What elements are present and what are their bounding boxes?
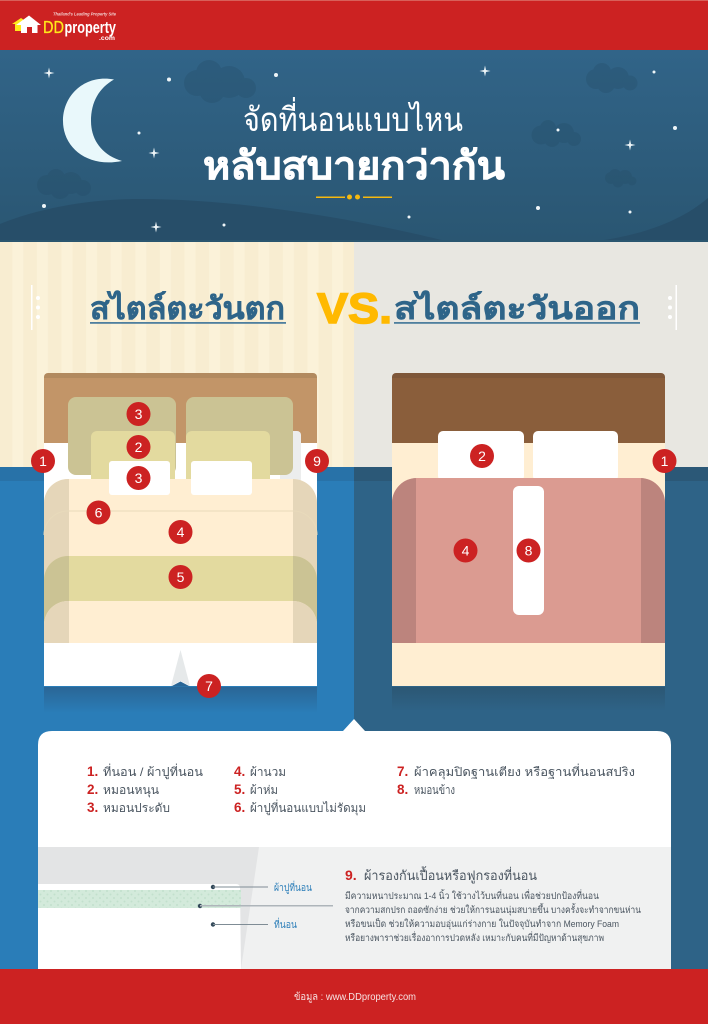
side bolster bbox=[513, 486, 544, 615]
number badges: 4 bbox=[177, 524, 185, 540]
legend list: หมอนประดับ bbox=[103, 801, 170, 815]
legend list: 1. bbox=[87, 764, 98, 779]
small pillows bbox=[109, 461, 252, 495]
item 9 description: หรือขนเป็ด ช่วยให้ความอบอุ่นแก่ร่างกาย ในปัจจุบันทำจาก Memory Foam bbox=[345, 917, 619, 930]
icon: crescent moon bbox=[63, 79, 122, 162]
source text: ข้อมูล : www.DDproperty.com bbox=[294, 991, 416, 1003]
number badges: 7 bbox=[205, 678, 213, 694]
item 9 description: มีความหนาประมาณ 1-4 นิ้ว ใช้วางไว้บนที่นอน เพื่อช่วยปกป้องที่นอน bbox=[345, 889, 599, 902]
logo: DDproperty: .com bbox=[99, 35, 115, 42]
wall ornament right bbox=[668, 285, 677, 330]
mattress pad panel bbox=[38, 847, 671, 969]
shadow bbox=[44, 687, 317, 713]
number badges: 4 bbox=[462, 542, 470, 558]
number badges: 8 bbox=[525, 542, 533, 558]
headboard bbox=[44, 373, 317, 453]
callout: fitted sheet bbox=[211, 880, 312, 894]
legend list: ผ้าปูที่นอนแบบไม่รัดมุม bbox=[250, 799, 366, 816]
callout: mattress: ที่นอน bbox=[274, 917, 297, 931]
night sky panel bbox=[0, 50, 708, 242]
title: หลับสบายกว่ากัน bbox=[203, 145, 505, 188]
item 9 description: หรือยางพาราช่วยเรื่องอาการปวดหลัง เหมาะกับคนที่มีปัญหาด้านสุขภาพ bbox=[345, 931, 604, 944]
hills bbox=[0, 198, 708, 242]
callout: mattress pad bbox=[198, 904, 333, 908]
logo: DDproperty: Thailand's Leading Property Site bbox=[53, 12, 116, 18]
shadow bbox=[392, 687, 665, 711]
bed valance fold bbox=[171, 650, 190, 686]
eastern bed bbox=[392, 373, 665, 711]
legend list: 4. bbox=[234, 764, 245, 779]
pillows bbox=[91, 431, 270, 491]
quilt bbox=[392, 478, 665, 643]
icon: house bbox=[12, 16, 41, 33]
footer bar bbox=[0, 969, 708, 1024]
wall: western room bbox=[0, 242, 354, 467]
title: จัดที่นอนแบบไหน bbox=[243, 97, 463, 138]
heading: western style: สไตล์ตะวันตก bbox=[90, 290, 285, 326]
heading: eastern style: สไตล์ตะวันออก bbox=[394, 290, 640, 326]
legend list: 7. bbox=[397, 764, 408, 779]
floor: eastern room bbox=[354, 467, 708, 969]
number badges: 9 bbox=[313, 453, 321, 469]
mattress pad edge bbox=[280, 431, 301, 483]
wall ornament left bbox=[31, 285, 40, 330]
item 9 heading: 9. bbox=[345, 867, 357, 883]
legend card bbox=[38, 719, 671, 969]
legend list: ผ้าห่ม bbox=[250, 783, 278, 797]
clouds bbox=[37, 60, 638, 199]
title ornament bbox=[316, 194, 392, 200]
number badges: 5 bbox=[177, 569, 185, 585]
stars bbox=[42, 66, 677, 232]
fitted sheet bbox=[44, 479, 317, 643]
floor: western room bbox=[0, 467, 354, 969]
mattress base bbox=[44, 443, 317, 686]
mattress cross-section bbox=[38, 884, 241, 969]
callout: mattress bbox=[211, 917, 297, 931]
quilt foot bbox=[44, 601, 317, 643]
legend list: 2. bbox=[87, 782, 98, 797]
item 9 description: จากความสกปรก ถอดซักง่าย ช่วยให้การนอนนุ่มสบายขึ้น บางครั้งจะทำจากขนห่าน bbox=[345, 903, 641, 916]
legend list: ที่นอน / ผ้าปูที่นอน bbox=[103, 763, 203, 780]
number badges: 3 bbox=[135, 470, 143, 486]
legend list: ผ้าคลุมปิดฐานเตียง หรือฐานที่นอนสปริง bbox=[414, 763, 635, 780]
item 9 description bbox=[345, 889, 641, 944]
number badges: 6 bbox=[95, 504, 103, 520]
callout: fitted sheet: ผ้าปูที่นอน bbox=[274, 880, 312, 894]
legend list: ผ้านวม bbox=[250, 765, 286, 779]
number badges: 1 bbox=[39, 453, 47, 469]
header bar bbox=[0, 0, 708, 50]
legend list: 3. bbox=[87, 800, 98, 815]
number badges bbox=[31, 402, 676, 698]
number badges: 3 bbox=[135, 406, 143, 422]
legend list: 6. bbox=[234, 800, 245, 815]
logo: DDproperty: DD bbox=[43, 17, 64, 37]
legend list: หมอนข้าง bbox=[414, 783, 455, 797]
legend list: 8. bbox=[397, 782, 408, 797]
logo: DDproperty: property bbox=[64, 18, 116, 37]
wall: eastern room bbox=[354, 242, 708, 467]
number badges: 2 bbox=[478, 448, 486, 464]
item 9 heading: ผ้ารองกันเปื้อนหรือฟูกรองที่นอน bbox=[364, 866, 537, 884]
legend list bbox=[87, 763, 635, 816]
headboard bbox=[392, 373, 665, 453]
blanket bbox=[44, 556, 317, 625]
decorative pillows back bbox=[68, 397, 293, 475]
number badges: 2 bbox=[135, 439, 143, 455]
number badges: 1 bbox=[661, 453, 669, 469]
legend list: หมอนหนุน bbox=[103, 783, 159, 798]
logo: DDproperty bbox=[12, 12, 116, 42]
western bed bbox=[44, 373, 317, 713]
mattress bbox=[392, 443, 665, 686]
legend list: 5. bbox=[234, 782, 245, 797]
pillows bbox=[438, 431, 618, 481]
heading: VS: VS. bbox=[317, 285, 392, 333]
title bbox=[203, 97, 505, 188]
